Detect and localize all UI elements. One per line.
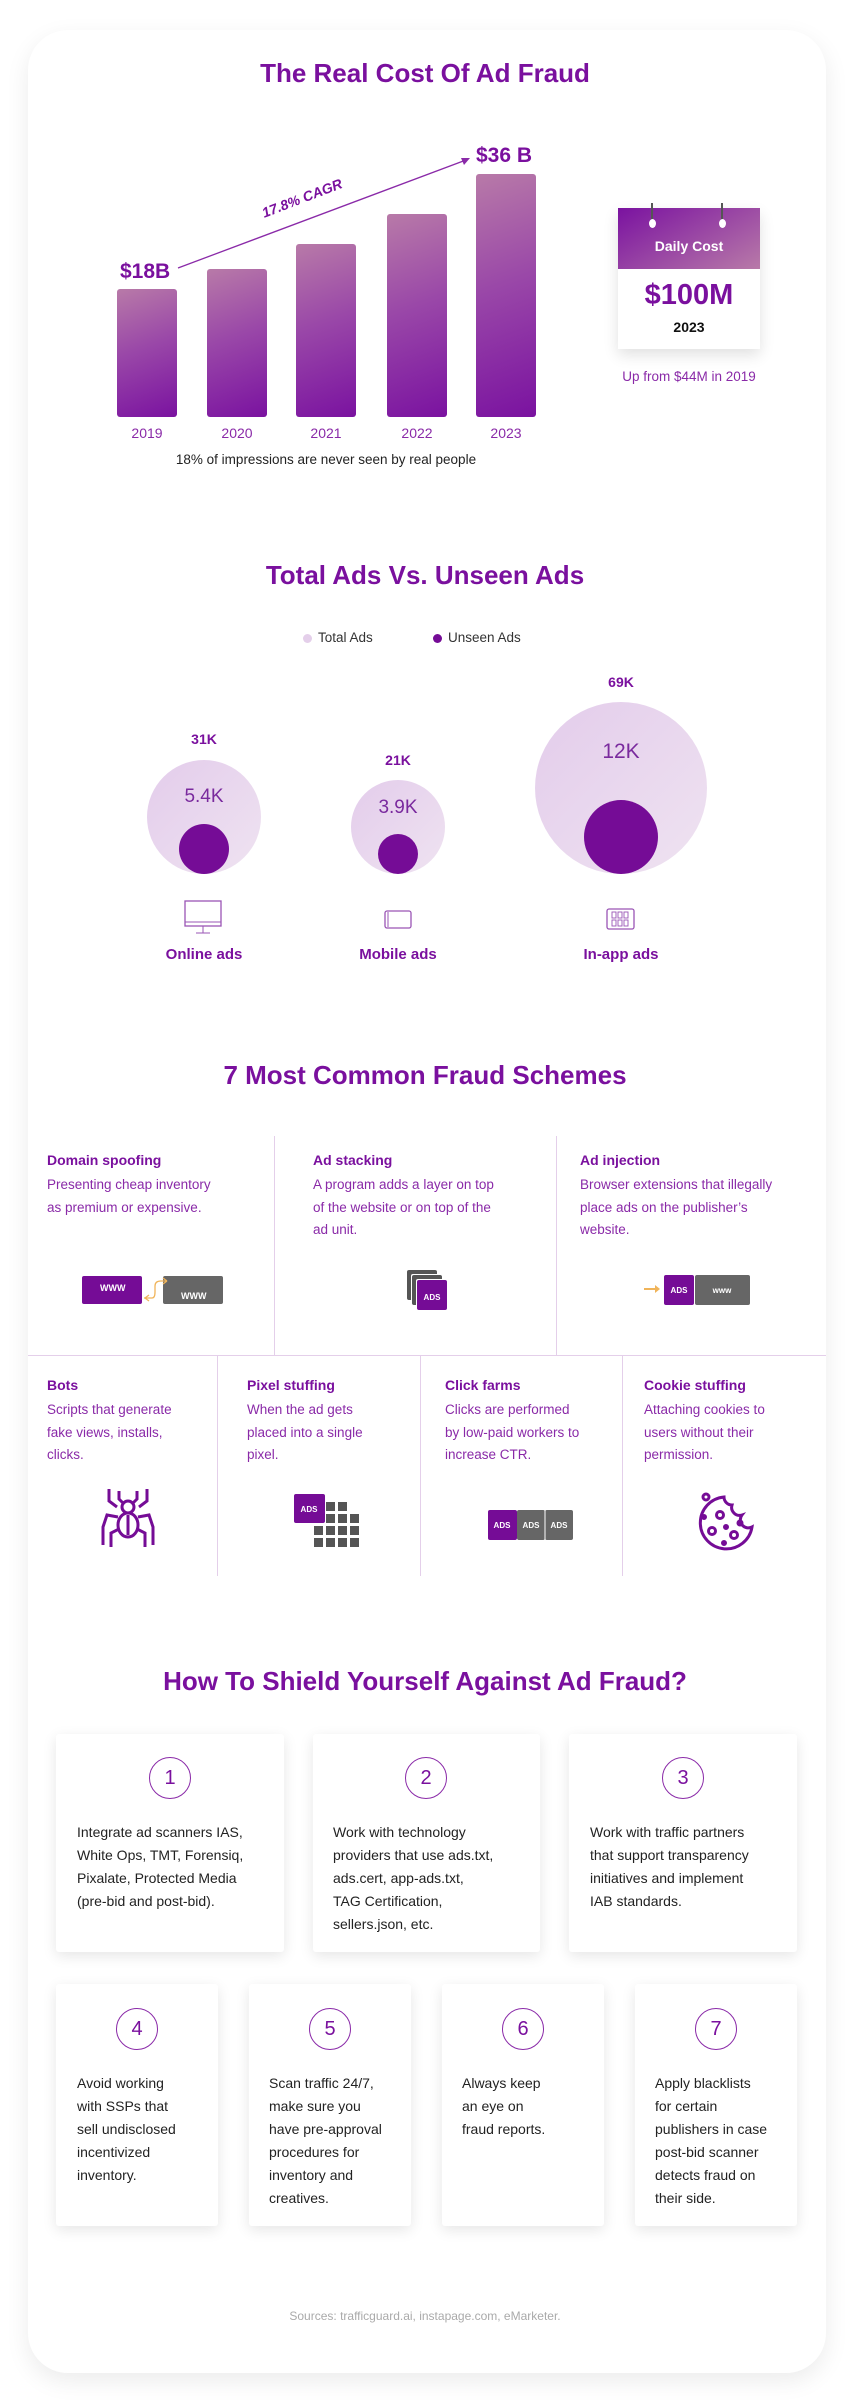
scheme: click farms: ADS (523, 1521, 540, 1530)
scheme: bots: fake views, installs, (47, 1424, 163, 1440)
icon: tablet (384, 910, 412, 929)
tip card 4: with SSPs that (77, 2098, 168, 2114)
tip card 1: White Ops, TMT, Forensiq, (77, 1847, 243, 1863)
label: online ads: Online ads (166, 946, 242, 963)
title: shield: How To Shield Yourself Against Ad Fraud? (163, 1666, 687, 1696)
tip card 6: fraud reports. (462, 2121, 545, 2137)
title: fraud schemes: 7 Most Common Fraud Schemes (223, 1060, 627, 1090)
tip card 3: Work with traffic partners (590, 1824, 744, 1840)
tip card 4: inventory. (77, 2167, 137, 2183)
scheme: ad injection (580, 1152, 772, 1305)
bar chart: $36 B (476, 144, 532, 167)
scheme: bots: clicks. (47, 1447, 84, 1462)
scheme: ad injection: www (712, 1286, 732, 1295)
calendar: daily cost: $100M (645, 279, 733, 311)
tip card 2 (313, 1734, 540, 1952)
tip card 7 (635, 1984, 797, 2226)
scheme: click farms: by low-paid workers to (445, 1424, 579, 1440)
bar chart: 18% of impressions are never seen by real people (176, 452, 476, 467)
bubble: online: 5.4K (184, 786, 224, 807)
bubble: in-app: 69K (608, 674, 634, 690)
scheme: ad injection: place ads on the publisher’s (580, 1200, 748, 1214)
tip card 4 (56, 1984, 218, 2226)
legend: Unseen Ads (448, 630, 521, 645)
tip card 2: providers that use ads.txt, (333, 1847, 493, 1863)
title: real cost: The Real Cost Of Ad Fraud (260, 58, 590, 88)
scheme: click farms (445, 1377, 579, 1540)
scheme: ad stacking: ADS (424, 1293, 441, 1302)
scheme: ad stacking: Ad stacking (313, 1152, 392, 1168)
icon: app grid (606, 908, 635, 930)
legend (303, 630, 521, 645)
scheme: bots (47, 1377, 172, 1547)
scheme: pixel stuffing: placed into a single (247, 1424, 363, 1440)
bubble: in-app (535, 674, 707, 874)
scheme: pixel stuffing: pixel. (247, 1447, 279, 1462)
tip card 3: 3 (677, 1767, 689, 1789)
tip card 2: Work with technology (333, 1824, 466, 1840)
tip card 4: Avoid working (77, 2075, 164, 2091)
tip card 7: Apply blacklists (655, 2075, 751, 2091)
scheme: cookie stuffing (644, 1377, 765, 1550)
scheme: bots: Bots (47, 1377, 78, 1393)
tip card 4: incentivized (77, 2144, 150, 2160)
tip card 6 (442, 1984, 604, 2226)
scheme: ad injection: ADS (671, 1286, 688, 1295)
bubble chart (147, 674, 707, 874)
bar chart: 2021 (310, 425, 342, 441)
bar chart: $18B (120, 260, 170, 283)
tip card 2: ads.cert, app-ads.txt, (333, 1870, 464, 1886)
bar chart (117, 144, 536, 467)
scheme: domain spoofing: WWW (100, 1283, 126, 1293)
icon: monitor (184, 900, 222, 934)
tip card 2: 2 (420, 1767, 432, 1789)
label: in-app ads: In-app ads (583, 946, 658, 963)
calendar: daily cost (614, 203, 764, 359)
scheme: cookie stuffing: users without their (644, 1424, 754, 1440)
scheme: ad injection: Browser extensions that illegally (580, 1177, 772, 1192)
bubble: mobile: 3.9K (378, 797, 418, 818)
scheme: ad injection: website. (580, 1222, 630, 1237)
tip card 7: their side. (655, 2190, 716, 2206)
scheme: cookie stuffing: Attaching cookies to (644, 1402, 765, 1417)
tip card 5: inventory and (269, 2167, 353, 2183)
scheme: click farms: Clicks are performed (445, 1402, 570, 1417)
scheme: ad stacking (313, 1152, 494, 1310)
bubble: in-app: 12K (602, 740, 640, 763)
tip card 5: have pre-approval (269, 2121, 382, 2137)
scheme: pixel stuffing (247, 1377, 363, 1547)
scheme: pixel stuffing: ADS (301, 1505, 318, 1514)
bar chart: 2019 (131, 425, 163, 441)
tip card 7: post-bid scanner (655, 2144, 759, 2160)
tip card 1 (56, 1734, 284, 1952)
scheme: pixel stuffing: Pixel stuffing (247, 1377, 335, 1393)
scheme: cookie stuffing: permission. (644, 1447, 713, 1462)
tip card 5 (249, 1984, 411, 2226)
scheme grid lines (28, 1136, 826, 1576)
tip card 7: publishers in case (655, 2121, 767, 2137)
scheme: domain spoofing: Presenting cheap inventory (47, 1177, 211, 1192)
tip card 7: for certain (655, 2098, 717, 2114)
scheme: domain spoofing: Domain spoofing (47, 1152, 161, 1168)
scheme: bots: Scripts that generate (47, 1402, 172, 1417)
scheme: click farms: Click farms (445, 1377, 520, 1393)
scheme: ad injection: Ad injection (580, 1152, 660, 1168)
tip card 1: (pre-bid and post-bid). (77, 1893, 215, 1909)
calendar: daily cost: 2023 (673, 319, 705, 335)
tip card 5: procedures for (269, 2144, 359, 2160)
tip card 1: Integrate ad scanners IAS, (77, 1824, 243, 1840)
bubble: mobile (351, 752, 445, 874)
scheme: click farms: ADS (551, 1521, 568, 1530)
scheme: ad stacking: of the website or on top of the (313, 1200, 491, 1214)
scheme: ad stacking: ad unit. (313, 1222, 357, 1237)
bubble: mobile: 21K (385, 752, 411, 768)
label: mobile ads: Mobile ads (359, 946, 437, 963)
tip card 2: TAG Certification, (333, 1893, 442, 1909)
tip card 4: 4 (131, 2018, 143, 2040)
scheme: domain spoofing: WWW (181, 1291, 207, 1301)
tip card 7: 7 (710, 2018, 722, 2040)
tip card 3: initiatives and implement (590, 1870, 743, 1886)
tip card 3: IAB standards. (590, 1893, 682, 1909)
tip card 6: an eye on (462, 2098, 524, 2114)
tip card 5: Scan traffic 24/7, (269, 2075, 374, 2091)
bubble: online: 31K (191, 731, 217, 747)
tip card 1: Pixalate, Protected Media (77, 1870, 237, 1886)
tip card 5: 5 (324, 2018, 336, 2040)
calendar: daily cost: Daily Cost (655, 238, 723, 254)
caption: up from: Up from $44M in 2019 (622, 369, 756, 384)
sources: Sources: trafficguard.ai, instapage.com, eMarketer. (289, 2309, 561, 2323)
bar chart: 2023 (490, 425, 522, 441)
bar chart: 2020 (221, 425, 253, 441)
tip card 2: sellers.json, etc. (333, 1916, 433, 1932)
bubble: online (147, 731, 261, 874)
tip card 5: make sure you (269, 2098, 361, 2114)
scheme: domain spoofing: as premium or expensive. (47, 1200, 202, 1214)
scheme: pixel stuffing: When the ad gets (247, 1402, 353, 1417)
title: total vs unseen: Total Ads Vs. Unseen Ads (266, 560, 584, 590)
tip card 4: sell undisclosed (77, 2121, 176, 2137)
legend: Total Ads (318, 630, 373, 645)
scheme: domain spoofing (47, 1152, 223, 1304)
tip card 5: creatives. (269, 2190, 329, 2206)
tip card 6: Always keep (462, 2075, 541, 2091)
scheme: cookie stuffing: Cookie stuffing (644, 1377, 746, 1393)
scheme: click farms: increase CTR. (445, 1447, 531, 1462)
scheme: click farms: ADS (494, 1521, 511, 1530)
bar chart: 2022 (401, 425, 433, 441)
bar chart: 17.8% CAGR (260, 175, 344, 221)
tip card 6: 6 (517, 2018, 529, 2040)
scheme: ad stacking: A program adds a layer on top (313, 1177, 494, 1192)
tip card 7: detects fraud on (655, 2167, 755, 2183)
tip card 3: that support transparency (590, 1847, 749, 1863)
tip card 1: 1 (164, 1767, 176, 1789)
tip card 3 (569, 1734, 797, 1952)
